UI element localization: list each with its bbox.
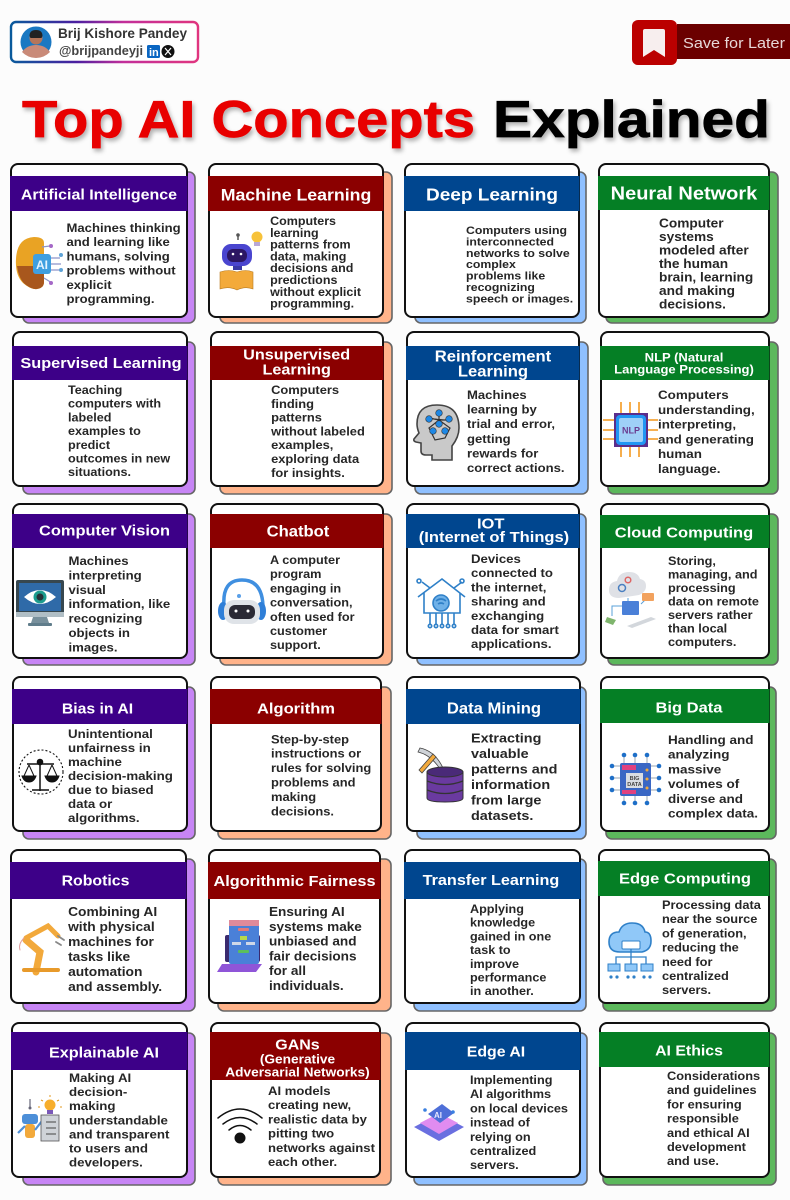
description: data, making [270, 250, 346, 263]
description: patterns [271, 411, 322, 424]
icon: big data chip: BIG [630, 776, 639, 782]
description: unfairness in [68, 741, 151, 755]
description: individuals. [269, 979, 344, 993]
description: decisions. [659, 297, 726, 311]
icon: chatbot with headset [218, 580, 266, 624]
description: data for smart [471, 623, 560, 637]
title: Top AI Concepts [22, 91, 475, 149]
description: human [658, 447, 702, 461]
description: learning by [467, 403, 537, 416]
description: computers with [68, 397, 161, 411]
description: patterns and [471, 761, 557, 776]
description: near the source [662, 913, 757, 926]
icon: scales [19, 750, 63, 794]
description: AI algorithms [470, 1088, 551, 1101]
description: knowledge [470, 916, 535, 930]
heading: Unsupervised [243, 347, 350, 363]
icon: X [162, 45, 174, 58]
heading [210, 346, 384, 380]
panel: Data Mining [406, 677, 586, 839]
description: programming. [270, 297, 354, 310]
heading [404, 862, 580, 899]
description: making [69, 1099, 116, 1113]
panel: Explainable AI [11, 1023, 195, 1185]
heading [12, 514, 188, 548]
panel: Unsupervised Learning [210, 332, 392, 494]
panel: IOT [406, 504, 586, 665]
icon: AI brain [16, 237, 63, 289]
description: exchanging [471, 609, 544, 623]
heading: Reinforcement [435, 349, 552, 365]
description: improve [470, 957, 519, 971]
description: making [271, 790, 316, 804]
heading: Computer Vision [39, 523, 170, 539]
heading: AI Ethics [655, 1043, 723, 1059]
description: volumes of [668, 777, 740, 791]
heading: Explainable AI [49, 1045, 159, 1061]
icon: cloud network [605, 572, 656, 628]
description: programming. [66, 292, 155, 306]
heading: (Generative [260, 1052, 335, 1066]
description: fair decisions [269, 949, 357, 963]
description: Considerations [667, 1069, 760, 1083]
icon: AI brain: AI [36, 258, 48, 272]
panel: Algorithmic Fairness [208, 850, 391, 1011]
description: automation [68, 965, 142, 979]
description: from large [471, 792, 542, 807]
icon: flowchart on laptop [217, 920, 262, 972]
icon: pickaxe and database [418, 748, 463, 802]
description: and use. [667, 1155, 719, 1168]
icon: robot with book [220, 232, 262, 290]
description: problems without [67, 264, 176, 277]
description: engaging in [270, 582, 341, 595]
description: in another. [470, 985, 534, 998]
icon: big data chip: DATA [627, 782, 642, 788]
description: rewards for [467, 447, 538, 460]
avatar [20, 26, 52, 58]
icon: NLP chip: NLP [622, 426, 640, 436]
heading [599, 1032, 770, 1067]
description: Computer [659, 216, 724, 230]
heading [210, 1032, 380, 1080]
description: getting [467, 432, 511, 446]
description: interpreting, [658, 417, 736, 431]
description: understandable [69, 1113, 168, 1127]
heading: GANs [275, 1037, 320, 1053]
description: data on remote [668, 595, 759, 608]
description: often used for [270, 610, 355, 624]
description: learning [270, 226, 319, 240]
description: situations. [68, 466, 131, 479]
description: instead of [470, 1116, 531, 1129]
description: Computers [658, 388, 729, 402]
description: visual [68, 583, 106, 597]
description: machines for [68, 935, 154, 949]
description: than local [668, 622, 727, 635]
description: and generating [658, 432, 754, 446]
icon: bookmark [643, 29, 665, 57]
description: problems like [466, 269, 546, 282]
description: recognizing [466, 280, 535, 294]
description: complex data. [668, 806, 758, 820]
title: Explained [493, 91, 770, 149]
heading: Transfer Learning [423, 873, 559, 889]
panel: Cloud Computing [600, 504, 778, 665]
description: algorithms. [68, 811, 140, 825]
panel: Chatbot [210, 504, 392, 665]
author name: Brij Kishore Pandey [58, 26, 187, 41]
panel: Transfer Learning [404, 850, 586, 1011]
panel: Bias in AI [12, 677, 195, 839]
panel: Computer Vision [12, 504, 195, 665]
description: centralized [470, 1144, 536, 1158]
heading: Neural Network [611, 184, 758, 204]
description: of generation, [662, 927, 747, 940]
panel: GANs [210, 1023, 391, 1185]
heading [12, 689, 188, 724]
heading: Supervised Learning [20, 356, 182, 372]
panel: Supervised Learning [12, 332, 195, 494]
heading [10, 862, 186, 899]
description: realistic data by [268, 1113, 367, 1126]
heading: Algorithmic Fairness [213, 874, 376, 890]
icon: edge AI chip: AI [434, 1111, 442, 1120]
heading [600, 689, 770, 723]
description: instructions or [271, 747, 361, 761]
save label: Save for Later [683, 35, 785, 52]
description: decisions and [270, 262, 353, 275]
description: interpreting [68, 569, 142, 582]
description: networks to solve [466, 246, 570, 260]
description: need for [662, 955, 713, 969]
panel: Neural Network [598, 164, 778, 323]
description: systems [659, 230, 714, 244]
description: Processing data [662, 898, 761, 912]
description: Ensuring AI [269, 905, 345, 919]
heading: Edge Computing [619, 871, 751, 887]
panel: Edge AI [405, 1023, 587, 1185]
description: responsible [667, 1112, 739, 1125]
description: Extracting [471, 730, 541, 745]
heading: Algorithm [257, 701, 335, 717]
heading [208, 862, 380, 899]
description: systems make [269, 919, 362, 934]
heading: Cloud Computing [615, 525, 753, 541]
description: and assembly. [68, 980, 162, 994]
description: tasks like [68, 950, 130, 964]
description: Step-by-step [271, 733, 349, 746]
description: objects in [69, 626, 130, 640]
heading: Robotics [62, 873, 129, 889]
heading: Chatbot [267, 524, 330, 540]
description: gained in one [470, 930, 552, 943]
description: with physical [67, 920, 155, 934]
description: modeled after [659, 243, 749, 257]
description: without explicit [269, 285, 361, 299]
heading: Machine Learning [221, 186, 371, 204]
heading [11, 1032, 188, 1070]
icon: LinkedIn [147, 45, 160, 59]
heading [10, 176, 188, 211]
icon: AI head [414, 405, 459, 460]
description: outcomes in new [68, 452, 171, 465]
panel: NLP [600, 332, 778, 494]
description: computers. [668, 635, 736, 649]
description: customer [270, 624, 327, 638]
description: task to [470, 944, 511, 957]
description: Applying [470, 902, 524, 916]
heading [406, 346, 580, 380]
description: machine [68, 755, 122, 769]
description: managing, and [668, 568, 758, 581]
panel: Robotics [10, 850, 195, 1011]
heading: Learning [458, 364, 528, 380]
description: Storing, [668, 554, 716, 568]
description: AI models [268, 1084, 331, 1098]
description: on local devices [470, 1102, 568, 1115]
description: creating new, [268, 1099, 351, 1112]
description: Unintentional [68, 727, 153, 741]
description: conversation, [270, 596, 352, 609]
description: Implementing [470, 1073, 552, 1087]
heading [210, 689, 382, 724]
description: applications. [471, 638, 552, 651]
description: brain, learning [659, 270, 753, 284]
heading: Learning [263, 362, 331, 378]
description: correct actions. [467, 461, 565, 475]
description: servers. [470, 1159, 519, 1172]
description: due to biased [68, 783, 154, 797]
description: servers rather [668, 608, 753, 622]
description: processing [668, 581, 736, 595]
description: Combining AI [68, 905, 157, 919]
heading [598, 861, 770, 896]
panel: Algorithm [210, 677, 391, 839]
description: exploring data [271, 452, 359, 466]
description: Machines [467, 388, 527, 402]
heading [405, 1032, 580, 1070]
heading: Adversarial Networks) [225, 1065, 370, 1079]
heading: Data Mining [447, 701, 541, 717]
heading [600, 346, 770, 380]
description: problems and [271, 776, 355, 789]
description: massive [668, 762, 721, 776]
description: for ensuring [667, 1098, 742, 1111]
description: valuable [471, 746, 529, 761]
icon: NLP chip [603, 402, 658, 457]
description: patterns from [270, 238, 351, 251]
save for later button [632, 20, 790, 65]
description: Handling and [668, 733, 754, 747]
icon: eye on monitor [16, 580, 64, 626]
description: the human [659, 257, 728, 271]
description: connected to [471, 567, 553, 580]
description: datasets. [471, 808, 533, 823]
description: without labeled [270, 425, 365, 438]
panel: Artificial Intelligence [10, 164, 195, 323]
description: understanding, [658, 402, 755, 417]
icon: smart home [417, 579, 465, 628]
description: recognizing [69, 612, 142, 625]
description: support. [270, 639, 321, 652]
description: unbiased and [269, 934, 357, 948]
description: humans, solving [67, 250, 170, 263]
description: developers. [69, 1155, 143, 1169]
description: decision-making [68, 769, 173, 783]
description: sharing and [471, 595, 546, 608]
description: images. [69, 641, 118, 654]
description: A computer [270, 553, 340, 567]
description: Machines [68, 554, 129, 568]
description: relying on [470, 1130, 531, 1144]
description: and guidelines [667, 1084, 757, 1097]
icon: edge cloud network [608, 923, 653, 979]
description: predict [68, 438, 110, 452]
description: Teaching [68, 383, 122, 397]
description: for all [269, 964, 306, 978]
description: labeled [68, 411, 111, 424]
heading [600, 515, 770, 548]
heading: Bias in AI [62, 701, 133, 717]
icon: robot with checklist [18, 1095, 62, 1141]
icon: big data chip [610, 753, 661, 805]
description: the internet, [471, 581, 546, 594]
description: analyzing [668, 747, 730, 762]
description: data or [68, 797, 112, 811]
panel: Reinforcement Learning [406, 332, 588, 494]
description: information, like [68, 598, 170, 611]
heading [210, 514, 384, 548]
description: development [667, 1140, 746, 1154]
description: Making AI [69, 1071, 131, 1085]
heading: Language Processing) [614, 363, 754, 376]
description: Computers [270, 214, 336, 228]
icon: robotic arm [20, 926, 64, 972]
description: examples to [68, 425, 141, 438]
title [22, 91, 770, 149]
icon: edge AI chip [414, 1104, 464, 1141]
heading: Deep Learning [426, 184, 558, 204]
description: centralized [662, 969, 729, 983]
description: to users and [69, 1141, 148, 1155]
description: interconnected [466, 235, 554, 248]
description: networks against [268, 1141, 376, 1155]
description: and making [659, 284, 735, 298]
heading: (Internet of Things) [419, 530, 569, 546]
icon: LinkedIn: in [149, 47, 159, 59]
description: Computers using [466, 223, 567, 237]
heading [208, 176, 384, 211]
description: examples, [271, 439, 333, 452]
description: Machines thinking [67, 221, 181, 235]
panel: AI Ethics [599, 1023, 776, 1185]
icon: wireless signal [218, 1109, 262, 1143]
heading [12, 346, 188, 380]
description: explicit [66, 278, 112, 292]
description: reducing the [662, 941, 739, 954]
description: and learning like [67, 236, 170, 249]
panel: Edge Computing [598, 850, 776, 1011]
description: trial and error, [467, 418, 555, 431]
heading: IOT [477, 516, 505, 532]
description: and transparent [69, 1127, 170, 1141]
description: program [270, 568, 322, 581]
heading [406, 689, 580, 724]
description: Devices [471, 552, 521, 566]
heading [598, 176, 770, 210]
heading: Edge AI [467, 1044, 525, 1060]
description: decision- [69, 1085, 127, 1099]
description: servers. [662, 984, 711, 997]
description: pitting two [268, 1127, 334, 1140]
description: language. [658, 462, 720, 476]
description: information [471, 777, 550, 792]
author handle: @brijpandeyji [59, 44, 143, 58]
description: rules for solving [271, 762, 371, 775]
description: Computers [271, 383, 339, 397]
description: speech or images. [466, 292, 573, 305]
description: for insights. [271, 466, 345, 480]
description: predictions [270, 273, 338, 287]
panel: Machine Learning [208, 164, 392, 323]
heading [404, 176, 580, 211]
description: complex [466, 258, 516, 271]
heading: NLP (Natural [645, 351, 723, 364]
heading [406, 514, 580, 548]
description: each other. [268, 1155, 337, 1169]
description: and ethical AI [667, 1126, 750, 1140]
description: decisions. [271, 805, 334, 818]
panel: Deep Learning [404, 164, 586, 323]
description: finding [271, 397, 314, 411]
panel: Big Data [600, 677, 776, 839]
heading: Big Data [656, 700, 723, 716]
heading: Artificial Intelligence [21, 187, 178, 203]
author badge [11, 22, 198, 62]
description: performance [470, 971, 547, 984]
description: diverse and [668, 791, 743, 806]
